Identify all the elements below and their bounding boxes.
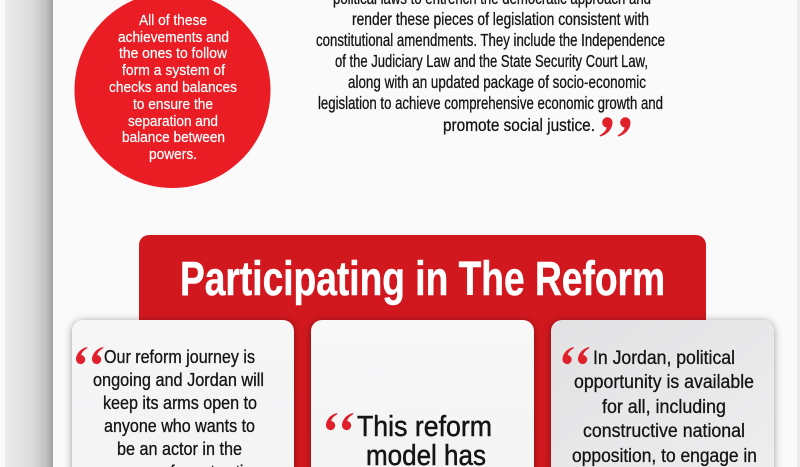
callout: red circle with checks and balances text: to ensure the: [133, 97, 213, 113]
panel: quote card one: be an actor in the: [117, 439, 242, 459]
quote text block: political laws and legislation: promote social justice.: [443, 115, 595, 135]
callout: red circle with checks and balances text: separation and: [128, 114, 218, 130]
panel: quote card three: [551, 320, 774, 467]
callout: red circle with checks and balances text: achievements and: [118, 30, 229, 46]
icon: opening red quote marks: [76, 347, 104, 364]
panel: quote card three: constructive national: [583, 421, 745, 442]
panel: quote card one: ongoing and Jordan will: [93, 370, 264, 390]
right side shading strip: [797, 0, 800, 467]
panel: quote card one: [72, 320, 294, 467]
callout: red circle with checks and balances text: powers.: [149, 147, 197, 163]
section header panel: Participating in The Reform: Participating in The Reform: [180, 253, 665, 306]
callout: red circle with checks and balances text: the ones to follow: [119, 46, 227, 62]
icon: opening red quote marks: [562, 347, 590, 364]
panel: quote card three: opportunity is available: [574, 372, 754, 393]
callout: red circle with checks and balances text: checks and balances: [109, 80, 237, 96]
icon: closing red quote marks: [600, 117, 631, 136]
quote text block: political laws and legislation: legislation to achieve comprehensive economic growth and: [318, 93, 663, 113]
icon: opening red quote marks: [326, 413, 354, 430]
panel: quote card one: keep its arms open to: [103, 393, 257, 413]
quote text block: political laws and legislation: of the Judiciary Law and the State Security Court Law,: [335, 51, 648, 71]
quote text block: political laws and legislation: constitutional amendments. They include the Independence: [316, 30, 665, 50]
panel: quote card two: [311, 320, 534, 467]
callout: red circle with checks and balances text: balance between: [122, 130, 225, 146]
callout: red circle with checks and balances text: [74, 0, 270, 188]
panel: quote card two: This reform: [357, 411, 492, 443]
quote text block: political laws and legislation: along with an updated package of socio-economic: [348, 72, 646, 92]
panel: quote card three: for all, including: [602, 397, 726, 418]
callout: red circle with checks and balances text: All of these: [139, 13, 207, 29]
panel: quote card three: In Jordan, political: [593, 348, 735, 369]
quote text block: political laws and legislation: render these pieces of legislation consistent with: [352, 9, 649, 29]
panel: quote card three: opposition, to engage in: [572, 446, 757, 467]
left side shading strip: [5, 0, 53, 467]
quote text block: political laws and legislation: [316, 0, 665, 136]
callout: red circle with checks and balances text: form a system of: [122, 63, 226, 79]
panel: quote card one: anyone who wants to: [104, 416, 255, 436]
panel: quote card one: Our reform journey is: [104, 347, 255, 367]
